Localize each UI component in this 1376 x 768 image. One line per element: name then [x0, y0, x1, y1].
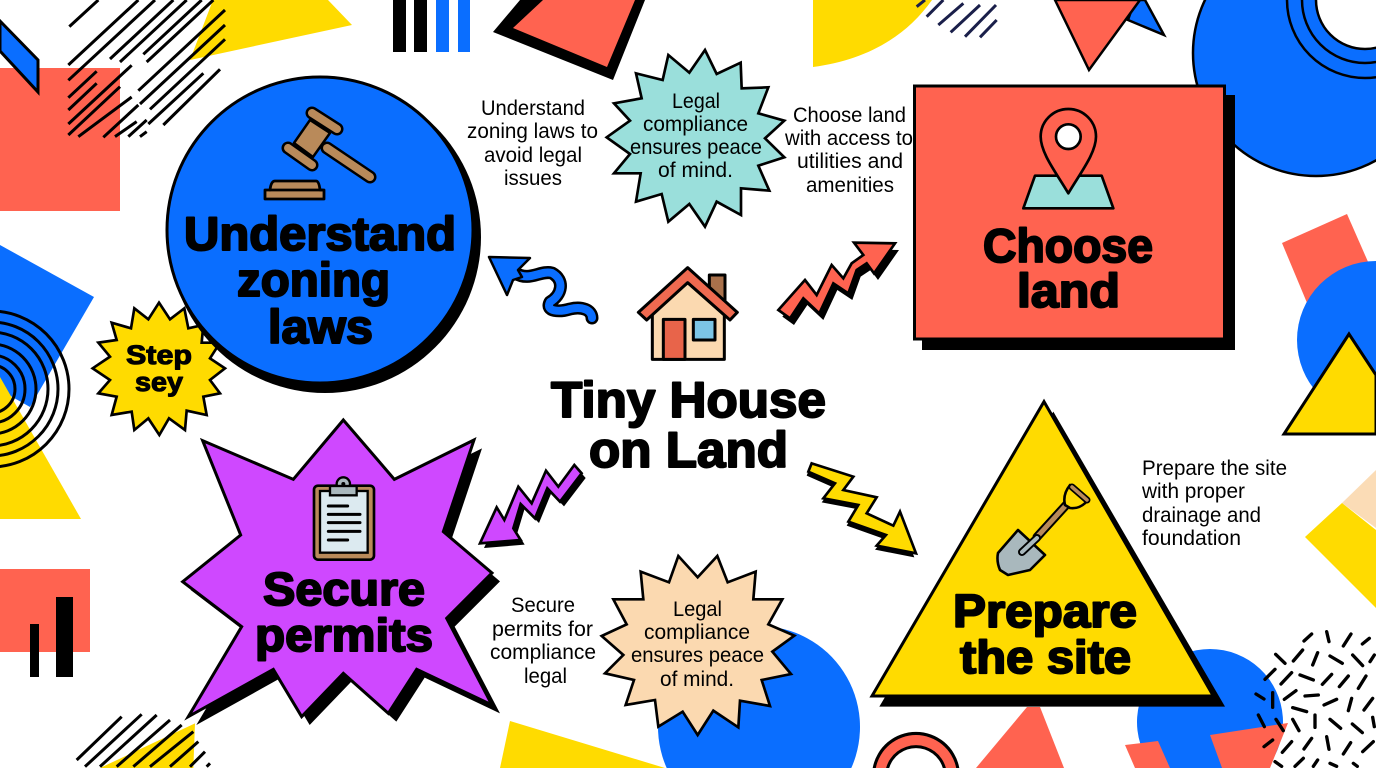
heading: understand zoning laws	[184, 207, 456, 353]
decorative background shapes: left side	[0, 245, 94, 677]
decorative background shapes: bottom right	[1125, 632, 1374, 768]
text block: understand zoning laws: avoid legal	[484, 144, 582, 167]
text block: prepare the site: foundation	[1142, 527, 1241, 550]
title	[551, 372, 826, 478]
text block: secure permits	[490, 594, 596, 688]
callout: legal compliance peach: compliance	[644, 621, 750, 644]
panel: prepare the site	[872, 402, 1225, 707]
text block: prepare the site: Prepare the site	[1142, 457, 1287, 480]
heading: understand zoning laws: Understand	[184, 207, 456, 260]
callout: legal compliance peach: of mind.	[660, 668, 734, 691]
heading: prepare the site: Prepare	[953, 585, 1137, 637]
decorative background shapes: top centre	[393, 0, 997, 80]
text block: choose land: Choose land	[793, 104, 906, 127]
heading: choose land	[983, 219, 1153, 317]
heading: understand zoning laws: zoning	[237, 253, 390, 306]
title: on Land	[589, 422, 788, 478]
heading: choose land: Choose	[983, 219, 1153, 272]
text block: prepare the site	[1141, 457, 1287, 550]
text block: understand zoning laws: zoning laws to	[467, 120, 598, 143]
decorative background shapes: top right	[1055, 0, 1376, 176]
panel: step badge: sey	[135, 367, 183, 397]
callout: legal compliance peach: ensures peace	[631, 644, 764, 667]
callout: legal compliance teal: Legal	[672, 90, 720, 113]
heading: secure permits	[255, 563, 433, 661]
icon: shovel	[997, 485, 1088, 575]
text block: understand zoning laws: issues	[504, 167, 562, 190]
panel: step badge	[93, 303, 225, 435]
text block: prepare the site: with proper	[1141, 480, 1245, 503]
panel: step badge: Step	[126, 340, 192, 370]
text block: secure permits: permits for	[492, 618, 593, 641]
text block: choose land: with access to	[784, 127, 913, 150]
icon: gavel	[265, 113, 370, 199]
arrow: purple bolt to secure permits	[480, 465, 586, 548]
decorative background shapes: bottom centre	[500, 626, 1064, 768]
text block: secure permits: Secure	[511, 594, 575, 617]
panel: secure permits	[183, 420, 500, 725]
arrow: yellow bolt to prepare the site	[807, 463, 916, 557]
callout: legal compliance teal: ensures peace	[630, 136, 762, 159]
panel: choose land	[914, 86, 1235, 350]
arrow: blue squiggle to understand zoning laws	[489, 257, 592, 318]
callout: legal compliance peach	[602, 556, 794, 735]
icon: house	[638, 268, 737, 359]
callout: legal compliance peach: Legal	[673, 598, 722, 621]
title: Tiny House	[551, 372, 826, 428]
text block: secure permits: legal	[524, 665, 567, 688]
callout: legal compliance teal: of mind.	[658, 159, 733, 182]
icon: clipboard	[314, 477, 374, 560]
panel: understand zoning laws	[167, 77, 481, 393]
heading: secure permits: Secure	[263, 563, 425, 615]
heading: prepare the site	[953, 585, 1137, 683]
decorative background shapes: top left	[0, 0, 352, 211]
heading: understand zoning laws: laws	[268, 300, 373, 353]
text block: understand zoning laws: Understand	[481, 97, 585, 120]
text block: choose land: amenities	[806, 174, 894, 197]
heading: secure permits: permits	[255, 609, 433, 661]
text block: understand zoning laws	[467, 97, 598, 190]
text block: secure permits: compliance	[490, 641, 596, 664]
heading: prepare the site: the site	[960, 631, 1131, 683]
text block: prepare the site: drainage and	[1142, 504, 1261, 527]
callout: legal compliance teal: compliance	[643, 113, 748, 136]
text block: choose land	[784, 104, 913, 197]
heading: choose land: land	[1017, 264, 1120, 317]
icon: map pin	[1023, 109, 1113, 208]
text block: choose land: utilities and	[797, 150, 903, 173]
decorative background shapes: right side	[1282, 214, 1376, 608]
callout: legal compliance teal	[607, 50, 784, 227]
decorative background shapes: bottom left hatch	[77, 714, 210, 768]
arrow: coral zigzag to choose land	[778, 243, 899, 325]
